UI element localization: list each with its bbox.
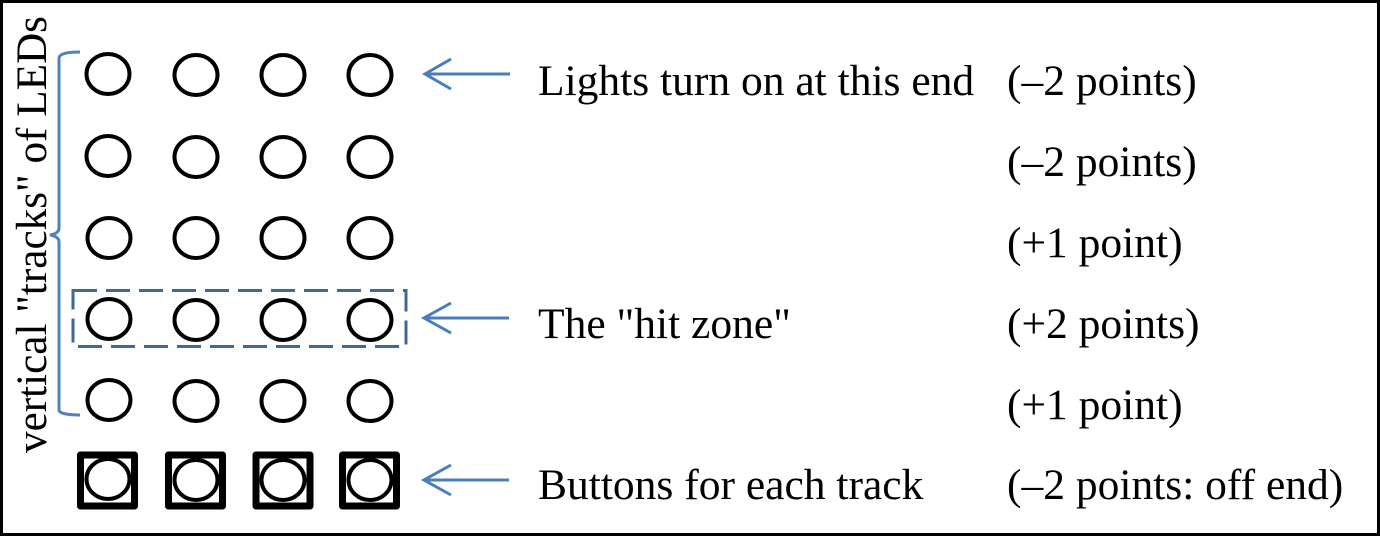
- label: lights: Lights turn on at this end: [538, 57, 974, 105]
- arrow: hit zone: [424, 303, 509, 333]
- vertical label: tracks of LEDs: vertical "tracks" of LEDs: [9, 16, 56, 453]
- bracket for tracks: [50, 52, 80, 415]
- label: hit zone: The "hit zone": [538, 300, 791, 348]
- LED row 2: [86, 136, 392, 177]
- buttons: [80, 455, 396, 506]
- points row 4: (+2 points): [1007, 300, 1199, 348]
- LED row 1: [86, 54, 392, 95]
- LED row 3: [88, 218, 392, 258]
- points row 5: (+1 point): [1007, 381, 1183, 429]
- arrow: lights: [425, 59, 510, 89]
- LED grid: [86, 54, 392, 500]
- points row 3: (+1 point): [1007, 219, 1183, 267]
- LED row 4: [88, 299, 392, 340]
- label: buttons: Buttons for each track: [538, 461, 924, 509]
- points column: [1007, 57, 1343, 509]
- points row 6: (–2 points: off end): [1007, 461, 1343, 509]
- points row 2: (–2 points): [1007, 138, 1197, 186]
- LED row 6: [86, 459, 392, 500]
- arrow: buttons: [424, 465, 509, 495]
- points row 1: (–2 points): [1007, 57, 1197, 105]
- LED row 5: [88, 380, 392, 421]
- hit zone dashed box: [73, 290, 406, 346]
